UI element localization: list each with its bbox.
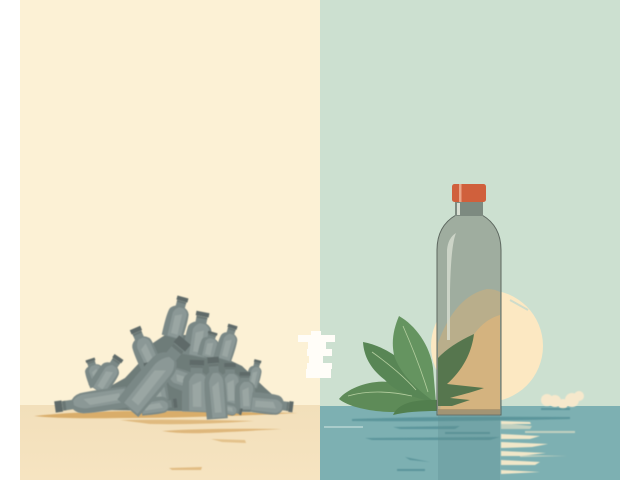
leaf seen through the bottle	[438, 334, 484, 406]
bottle reflection in the water	[438, 416, 500, 480]
bottle neck	[455, 201, 483, 216]
top leaf	[393, 316, 436, 403]
bottle base	[438, 409, 500, 415]
water ripples	[352, 408, 570, 471]
bottle cap	[452, 184, 486, 202]
leaf veins	[348, 326, 428, 396]
neck highlight	[457, 203, 460, 215]
lower warm reflection	[440, 315, 500, 410]
sun highlight	[510, 300, 528, 310]
sun reflection on the water	[501, 421, 575, 474]
bottle highlight	[447, 233, 456, 340]
lower left leaf	[339, 382, 432, 412]
clouds on the horizon	[541, 391, 584, 409]
panel: right water	[320, 406, 620, 480]
panel: left sand ground	[20, 405, 320, 480]
middle left leaf	[363, 342, 434, 402]
leaves	[339, 316, 440, 415]
panel: right mint background	[320, 0, 620, 406]
panel: left cream background	[20, 0, 320, 405]
bottle body	[437, 215, 501, 415]
sun seen through the bottle	[438, 289, 500, 414]
small bottom leaf	[393, 400, 440, 415]
reusable glass bottle	[437, 184, 501, 415]
pile of discarded plastic bottles	[53, 294, 294, 420]
white divider icon	[298, 331, 335, 378]
back of pile	[62, 335, 285, 412]
sun	[431, 290, 543, 402]
light ripple	[324, 426, 363, 428]
cap highlight	[459, 184, 462, 202]
sand shadows	[34, 411, 298, 470]
